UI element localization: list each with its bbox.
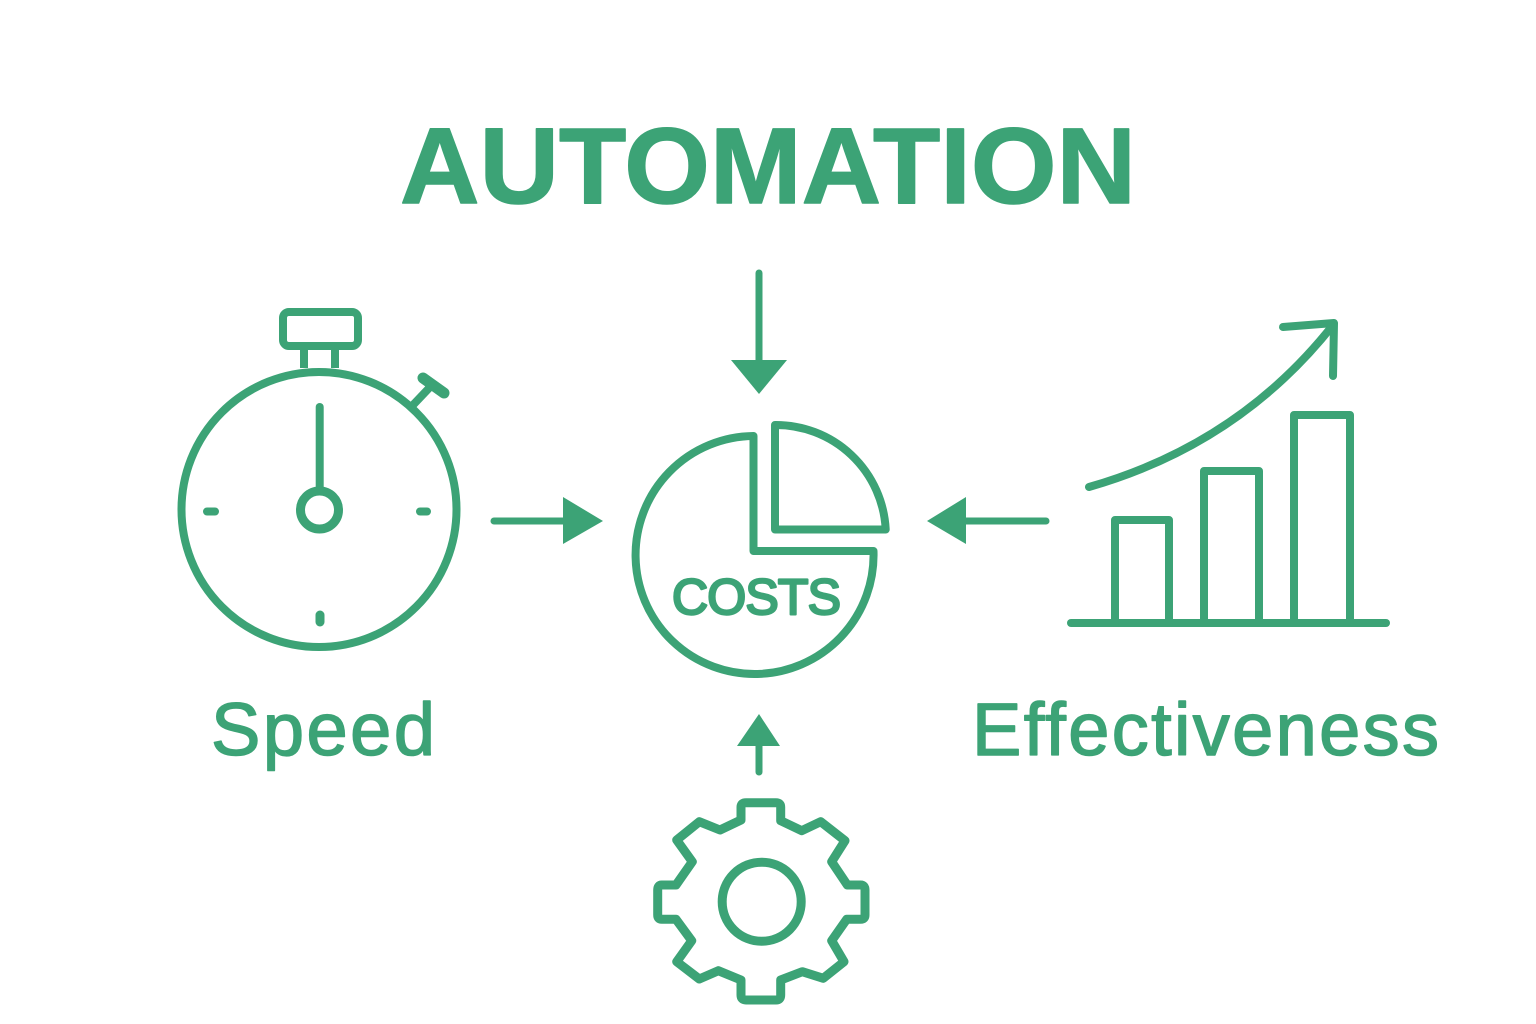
label: speed: Speed: [211, 688, 435, 771]
icon: gear: [658, 803, 865, 1000]
icon: stopwatch: [182, 312, 456, 647]
costs label: COSTS: [672, 569, 841, 625]
icon: rising bar chart: [1071, 323, 1386, 623]
arrow: automation down to costs: [731, 273, 787, 394]
label: effectiveness: Effectiveness: [972, 688, 1439, 771]
title: AUTOMATION: [400, 105, 1136, 226]
icon: costs pie chart: [636, 425, 886, 674]
arrow: gear up to costs: [737, 714, 780, 772]
arrow: speed to costs: [494, 497, 603, 544]
arrow: effectiveness to costs: [927, 497, 1046, 544]
